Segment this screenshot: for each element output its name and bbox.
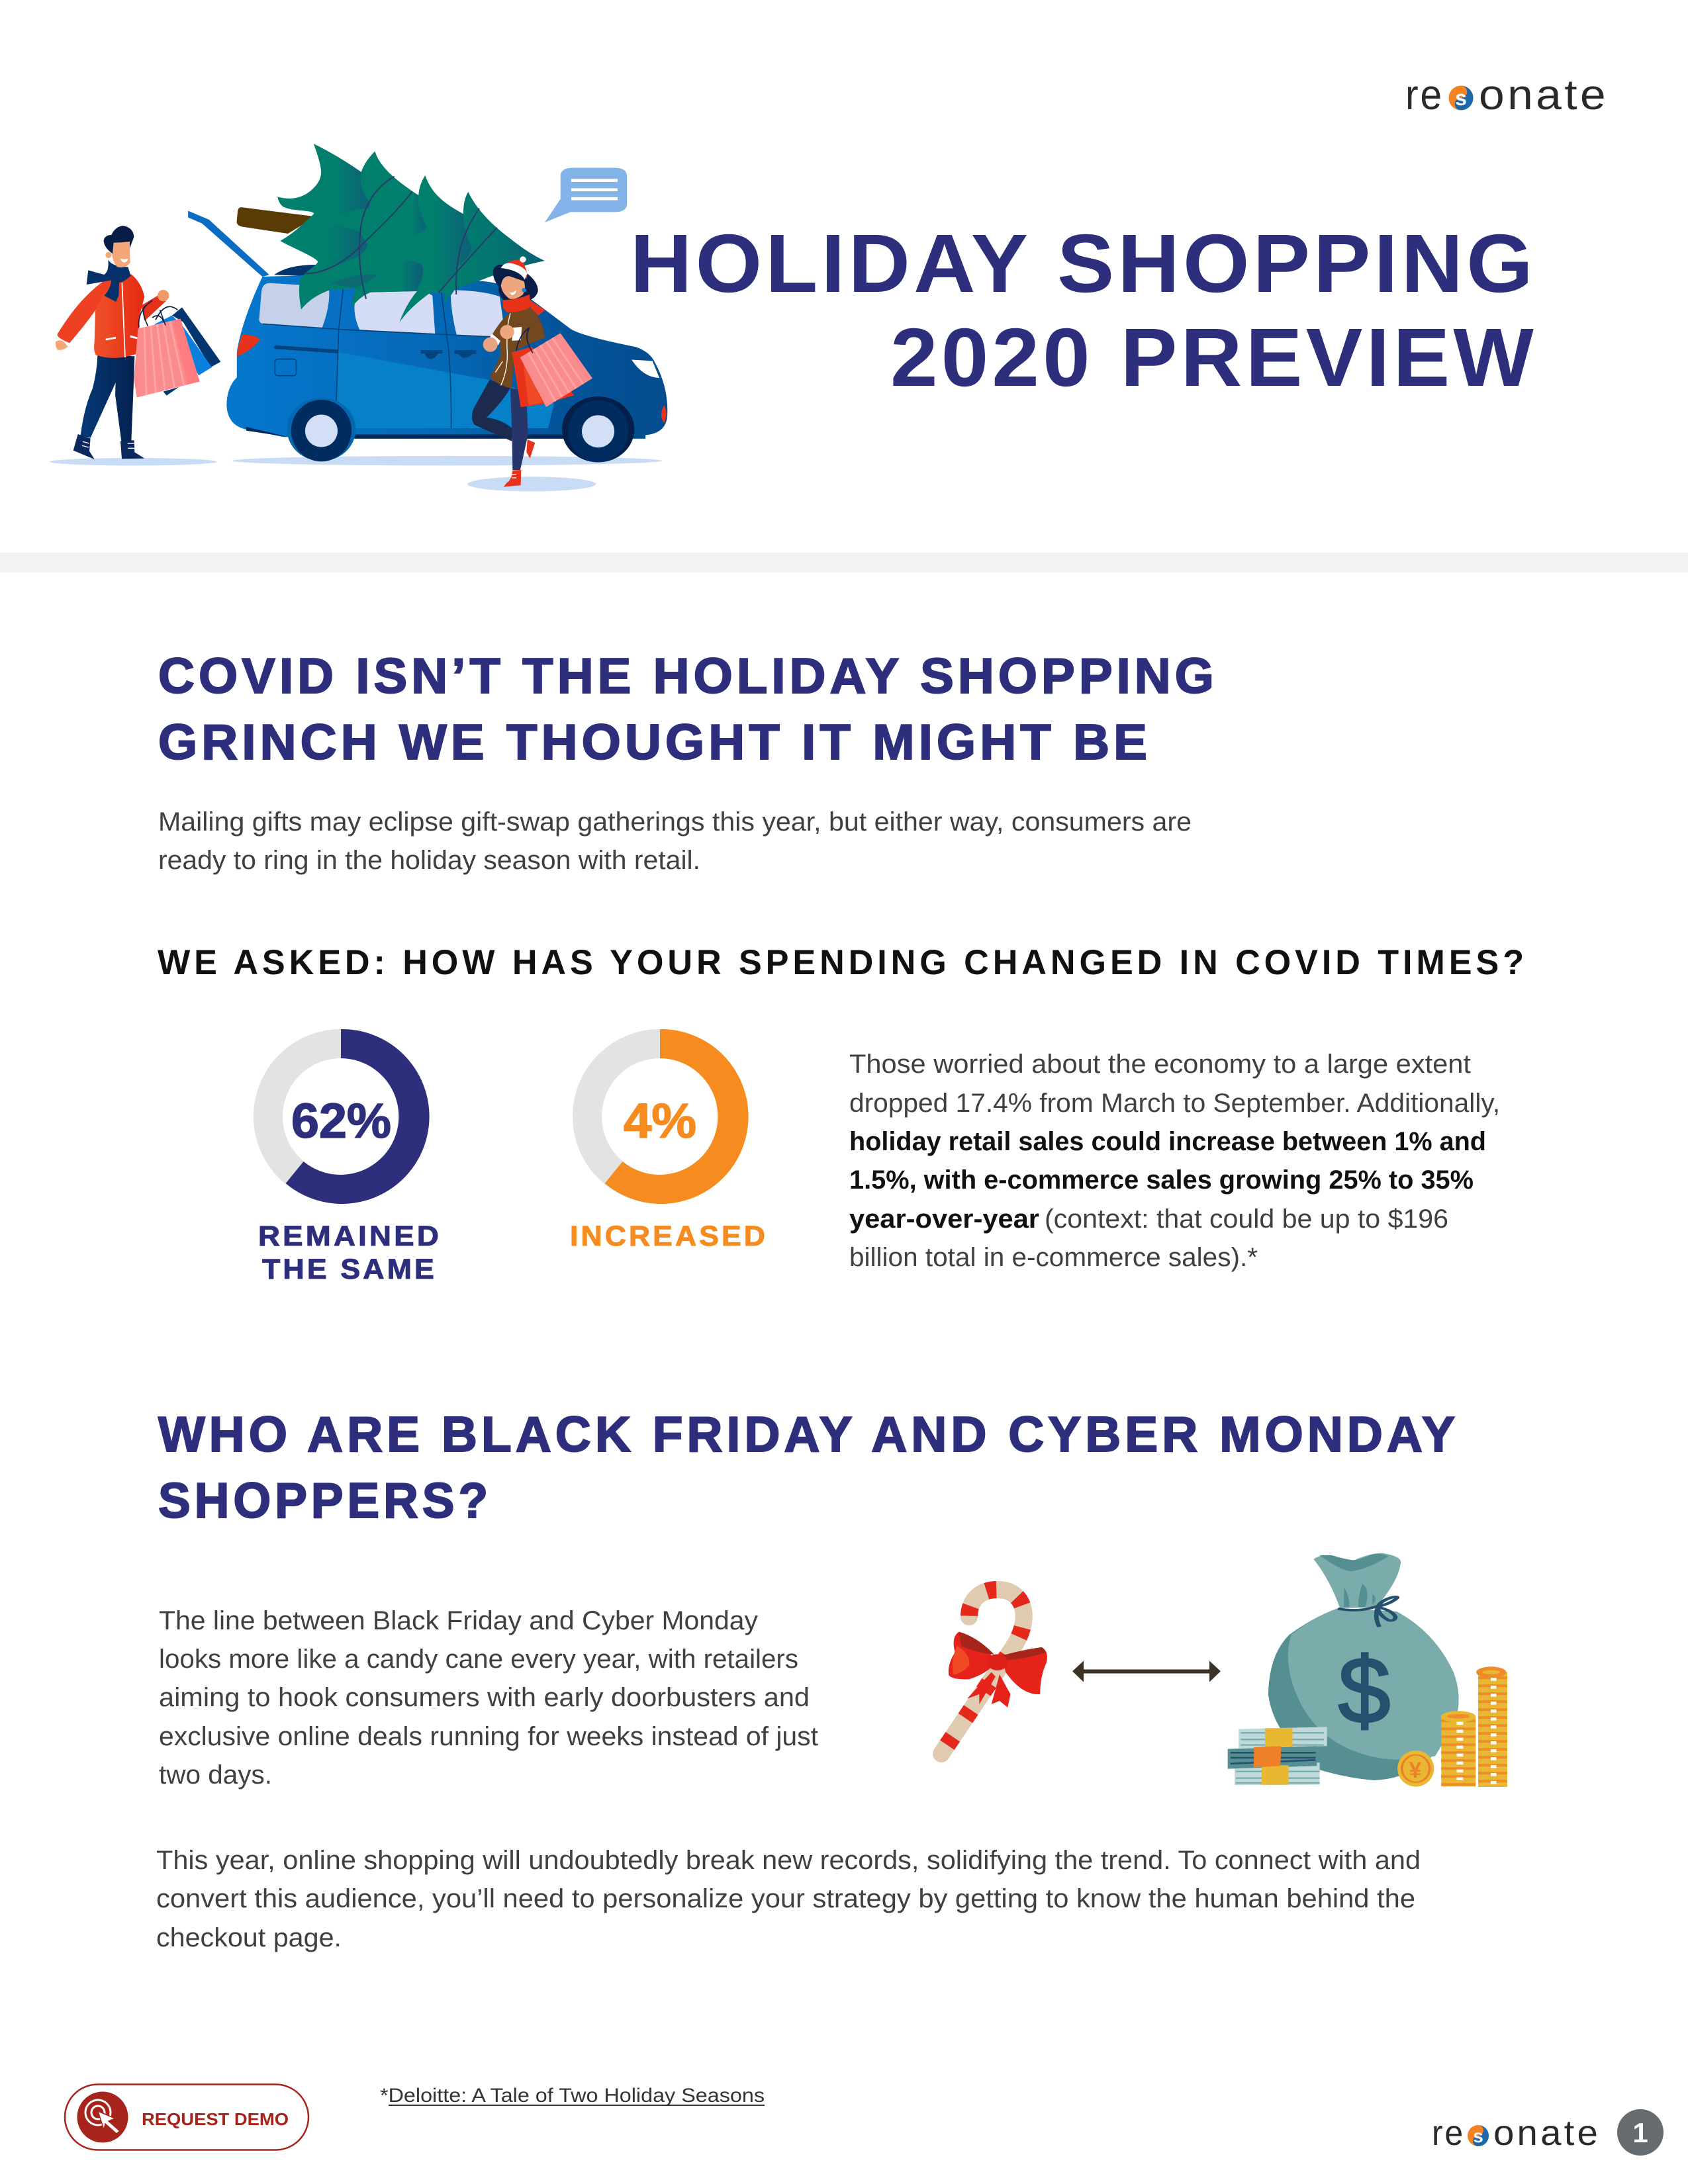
candy cane paragraph: [159, 1606, 818, 1790]
logo: resonate bottom: [1432, 2113, 1601, 2153]
logo: resonate top: onate: [1479, 71, 1609, 118]
logo: resonate bottom: re: [1432, 2113, 1465, 2153]
heading: shoppers: SHOPPERS?: [158, 1473, 492, 1528]
candy cane paragraph: aiming to hook consumers with early doorbusters and: [159, 1683, 810, 1712]
candy cane paragraph: The line between Black Friday and Cyber Monday: [159, 1606, 758, 1635]
economy paragraph: billion total in e-commerce sales).*: [849, 1243, 1258, 1272]
logo: resonate top: s: [1455, 86, 1467, 110]
icon: yen sign: ¥: [1409, 1758, 1422, 1783]
candy cane paragraph: exclusive online deals running for weeks instead of just: [159, 1722, 818, 1751]
heading: shoppers: [158, 1406, 1459, 1528]
intro paragraph: [158, 807, 1192, 875]
economy paragraph: (context: that could be up to $196: [1045, 1205, 1448, 1234]
hero illustration: shoppers, car and tree: [50, 144, 667, 491]
donut chart: 4% increased: INCREASED: [570, 1220, 768, 1252]
economy paragraph: [849, 1050, 1500, 1272]
icon: dollar sign: $: [1338, 1638, 1390, 1743]
heading: covid: [158, 648, 1218, 770]
logo: resonate bottom: s: [1473, 2126, 1483, 2146]
button: request demo: REQUEST DEMO: [142, 2109, 289, 2129]
economy paragraph: 1.5%, with e-commerce sales growing 25% to 35%: [849, 1165, 1474, 1195]
christmas tree on roof: [277, 144, 545, 322]
icon: candy cane: [941, 1590, 1047, 1754]
title: 2020 PREVIEW: [890, 312, 1537, 404]
heading: shoppers: WHO ARE BLACK FRIDAY AND CYBER MONDAY: [158, 1406, 1459, 1462]
donut chart: 4% increased: [570, 1029, 768, 1252]
closing paragraph: convert this audience, you’ll need to personalize your strategy by getting to know the human behind the: [156, 1884, 1415, 1913]
woman with shopping bags: [472, 256, 592, 487]
economy paragraph: year-over-year: [849, 1205, 1039, 1234]
intro paragraph: Mailing gifts may eclipse gift-swap gatherings this year, but either way, consumers are: [158, 807, 1192, 837]
donut chart: 62% remained the same: THE SAME: [262, 1253, 437, 1285]
wheels: [287, 398, 355, 461]
logo: resonate bottom: onate: [1493, 2113, 1601, 2153]
donut chart: 62% remained the same: 62%: [291, 1093, 391, 1148]
donut chart: 62% remained the same: [258, 1029, 442, 1285]
donut chart: 4% increased: 4%: [624, 1093, 696, 1148]
banknote stacks: [1235, 1727, 1327, 1785]
speech bubble: [545, 167, 627, 222]
divider band: [0, 553, 1688, 572]
subheading: question: WE ASKED: HOW HAS YOUR SPENDING CHANGED IN COVID TIMES?: [158, 943, 1528, 982]
closing paragraph: This year, online shopping will undoubtedly break new records, solidifying the trend. To connect with and: [156, 1846, 1421, 1875]
candy cane paragraph: looks more like a candy cane every year, with retailers: [159, 1645, 798, 1674]
button: request demo: [65, 2085, 308, 2150]
coin: [1397, 1751, 1434, 1787]
logo: resonate top: re: [1405, 71, 1444, 118]
title: [630, 218, 1537, 404]
economy paragraph: dropped 17.4% from March to September. Additionally,: [849, 1089, 1500, 1118]
logo: resonate top: [1405, 71, 1609, 118]
intro paragraph: ready to ring in the holiday season with retail.: [158, 846, 700, 875]
page number: 1: [1632, 2117, 1648, 2148]
tree trunk: [237, 207, 316, 234]
title: HOLIDAY SHOPPING: [630, 218, 1536, 310]
donut chart: 62% remained the same: REMAINED: [258, 1220, 442, 1252]
man with shopping bags: [56, 226, 220, 459]
arrow: double-headed: [1072, 1661, 1221, 1682]
candy cane paragraph: two days.: [159, 1760, 272, 1790]
heading: covid: GRINCH WE THOUGHT IT MIGHT BE: [158, 714, 1151, 770]
economy paragraph: Those worried about the economy to a large extent: [849, 1050, 1471, 1079]
icon: money bag with cash and coins: [1228, 1553, 1507, 1787]
coin stacks: [1441, 1716, 1476, 1786]
heading: covid: COVID ISN’T THE HOLIDAY SHOPPING: [158, 648, 1218, 704]
car: [226, 265, 667, 462]
closing paragraph: checkout page.: [156, 1923, 342, 1952]
footnote: *Deloitte: A Tale of Two Holiday Seasons: [380, 2085, 765, 2107]
page number: [1617, 2109, 1664, 2156]
ground shadows: [50, 456, 662, 491]
closing paragraph: [156, 1846, 1421, 1952]
open trunk lid: [188, 211, 269, 277]
economy paragraph: holiday retail sales could increase between 1% and: [849, 1127, 1486, 1156]
